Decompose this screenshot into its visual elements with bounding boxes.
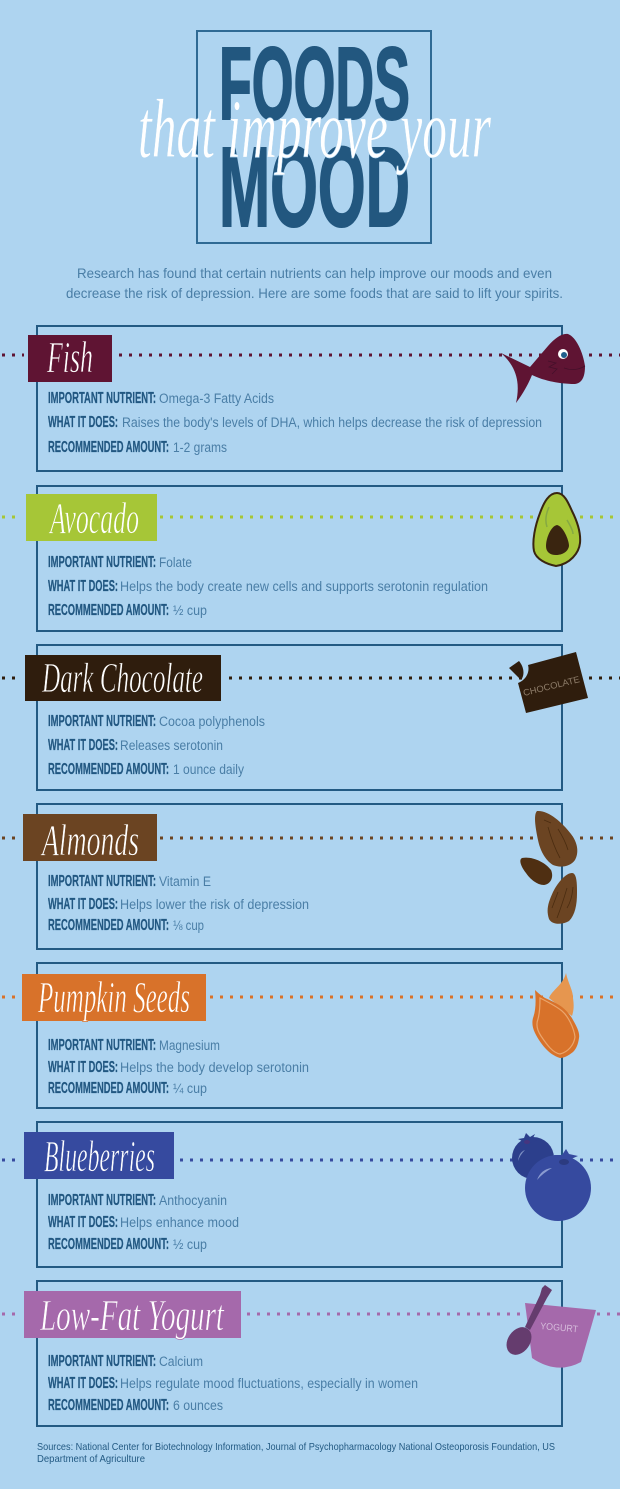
intro text bbox=[66, 265, 563, 301]
intro text: Research has found that certain nutrients can help improve our moods and even bbox=[77, 265, 552, 281]
fish details: 1-2 grams bbox=[173, 440, 227, 455]
panel: fish bbox=[2, 326, 620, 471]
label: blueberries: Blueberries bbox=[44, 1132, 155, 1181]
icon: avocado bbox=[533, 493, 580, 566]
dark chocolate details: Cocoa polyphenols bbox=[159, 714, 265, 729]
icon: chocolate bar bbox=[509, 652, 588, 713]
low-fat yogurt details: IMPORTANT NUTRIENT: bbox=[48, 1353, 156, 1370]
label: dark chocolate: Dark Chocolate bbox=[41, 656, 203, 702]
sources: Department of Agriculture bbox=[37, 1453, 145, 1465]
dark chocolate details bbox=[48, 713, 265, 778]
low-fat yogurt details: Calcium bbox=[159, 1354, 203, 1369]
pumpkin seeds details: Magnesium bbox=[159, 1038, 220, 1053]
avocado details: ½ cup bbox=[173, 603, 207, 618]
fish details: IMPORTANT NUTRIENT: bbox=[48, 390, 156, 407]
blueberries details: WHAT IT DOES: bbox=[48, 1214, 118, 1231]
fish details: RECOMMENDED AMOUNT: bbox=[48, 439, 169, 456]
sources: Sources: National Center for Biotechnology Information, Journal of Psychopharmacology National Osteoporosis Foundation, US bbox=[37, 1441, 555, 1453]
label: dark chocolate bbox=[25, 655, 221, 702]
low-fat yogurt details: 6 ounces bbox=[173, 1398, 223, 1413]
icon: yogurt cup and spoon: YOGURT bbox=[540, 1321, 579, 1335]
icon: fish bbox=[501, 334, 585, 403]
pumpkin seeds details: IMPORTANT NUTRIENT: bbox=[48, 1037, 156, 1054]
avocado details: Folate bbox=[159, 555, 192, 570]
almonds details: WHAT IT DOES: bbox=[48, 896, 118, 913]
blueberries details: RECOMMENDED AMOUNT: bbox=[48, 1236, 169, 1253]
dark chocolate details: WHAT IT DOES: bbox=[48, 737, 118, 754]
low-fat yogurt details: RECOMMENDED AMOUNT: bbox=[48, 1397, 169, 1414]
fish details: Raises the body's levels of DHA, which helps decrease the risk of depression bbox=[122, 415, 542, 430]
blueberries details bbox=[48, 1192, 239, 1253]
fish details: Omega-3 Fatty Acids bbox=[159, 391, 274, 406]
sources bbox=[37, 1441, 555, 1465]
panel: dark chocolate bbox=[2, 645, 620, 790]
panel: low-fat yogurt bbox=[2, 1281, 620, 1426]
dark chocolate details: Releases serotonin bbox=[120, 738, 223, 753]
pumpkin seeds details bbox=[48, 1037, 309, 1097]
pumpkin seeds details: ¼ cup bbox=[173, 1081, 207, 1096]
blueberries details: Helps enhance mood bbox=[120, 1215, 239, 1230]
avocado details: RECOMMENDED AMOUNT: bbox=[48, 602, 169, 619]
fish details bbox=[48, 390, 542, 456]
icon: blueberries bbox=[512, 1133, 591, 1221]
dark chocolate details: 1 ounce daily bbox=[173, 762, 244, 777]
almonds details: Helps lower the risk of depression bbox=[120, 897, 309, 912]
icon: chocolate bar: CHOCOLATE bbox=[522, 674, 581, 698]
icon: almonds bbox=[520, 811, 577, 924]
dark chocolate details: IMPORTANT NUTRIENT: bbox=[48, 713, 156, 730]
almonds details: ⅛ cup bbox=[173, 918, 204, 933]
panel: pumpkin seeds bbox=[2, 963, 620, 1108]
pumpkin seeds details: WHAT IT DOES: bbox=[48, 1059, 118, 1076]
avocado details: WHAT IT DOES: bbox=[48, 578, 118, 595]
low-fat yogurt details: Helps regulate mood fluctuations, especially in women bbox=[120, 1376, 418, 1391]
label: fish: Fish bbox=[46, 333, 93, 382]
avocado details: IMPORTANT NUTRIENT: bbox=[48, 554, 156, 571]
label: almonds: Almonds bbox=[40, 816, 139, 865]
blueberries details: ½ cup bbox=[173, 1237, 207, 1252]
fish details: WHAT IT DOES: bbox=[48, 414, 118, 431]
label: fish bbox=[28, 333, 112, 382]
title bbox=[138, 26, 491, 250]
title: MOOD bbox=[219, 124, 410, 250]
label: almonds bbox=[23, 814, 157, 865]
pumpkin seeds details: Helps the body develop serotonin bbox=[120, 1060, 309, 1075]
panel: avocado bbox=[2, 486, 620, 631]
avocado details: Helps the body create new cells and supports serotonin regulation bbox=[120, 579, 488, 594]
almonds details: IMPORTANT NUTRIENT: bbox=[48, 873, 156, 890]
label: low-fat yogurt: Low-Fat Yogurt bbox=[39, 1291, 225, 1340]
intro text: decrease the risk of depression. Here are some foods that are said to lift your spirits. bbox=[66, 285, 563, 301]
panel: almonds bbox=[2, 804, 620, 949]
almonds details: Vitamin E bbox=[159, 874, 211, 889]
low-fat yogurt details bbox=[48, 1353, 418, 1414]
panel: blueberries bbox=[2, 1122, 620, 1267]
dark chocolate details: RECOMMENDED AMOUNT: bbox=[48, 761, 169, 778]
label: avocado bbox=[26, 494, 157, 543]
label: pumpkin seeds bbox=[22, 973, 206, 1022]
label: pumpkin seeds: Pumpkin Seeds bbox=[37, 973, 190, 1022]
label: avocado: Avocado bbox=[48, 494, 139, 543]
blueberries details: IMPORTANT NUTRIENT: bbox=[48, 1192, 156, 1209]
pumpkin seeds details: RECOMMENDED AMOUNT: bbox=[48, 1080, 169, 1097]
label: blueberries bbox=[24, 1132, 174, 1181]
icon: yogurt cup and spoon bbox=[501, 1285, 596, 1368]
almonds details bbox=[48, 873, 309, 934]
title: FOODS bbox=[219, 26, 410, 141]
label: low-fat yogurt bbox=[24, 1291, 241, 1340]
low-fat yogurt details: WHAT IT DOES: bbox=[48, 1375, 118, 1392]
avocado details bbox=[48, 554, 488, 619]
icon: pumpkin seeds bbox=[532, 973, 579, 1058]
blueberries details: Anthocyanin bbox=[159, 1193, 227, 1208]
almonds details: RECOMMENDED AMOUNT: bbox=[48, 917, 169, 934]
